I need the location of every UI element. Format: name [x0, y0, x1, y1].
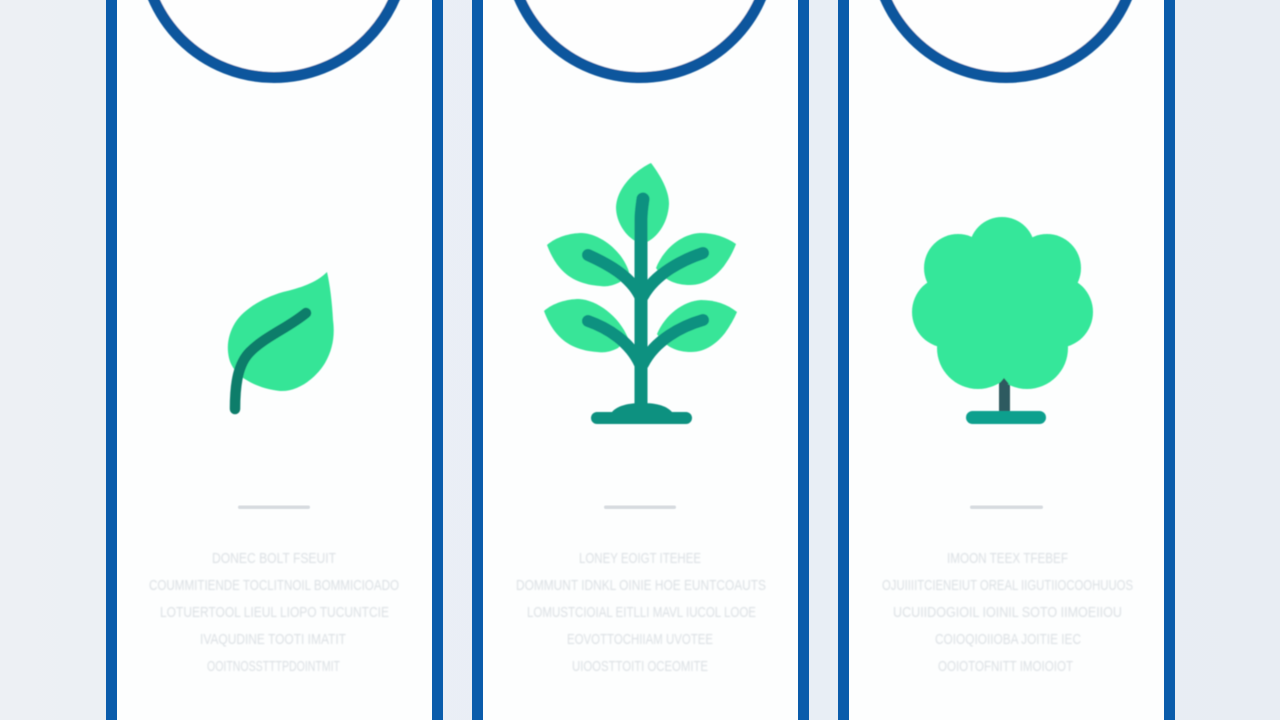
text block: young plant description: UIOOSTTOITI OCEOMITE [572, 658, 708, 675]
text block: mature tree description: UCUIIDOGIOIL IOINIL SOTO IIMOEIIOU [893, 604, 1122, 621]
panel: young plant stage [478, 0, 804, 720]
text block: seedling description: DONEC BOLT FSEUIT [212, 550, 336, 567]
text block: seedling description: COUMMITIENDE TOCLITNOIL BOMMICIOADO [149, 577, 399, 594]
text block: young plant description: LONEY EOIGT ITEHEE [579, 550, 701, 567]
divider: seedling [238, 506, 310, 509]
circle: young plant badge [508, 0, 772, 78]
text block: seedling description: IVAQUDINE TOOTI IMATIT [200, 631, 346, 648]
text block: young plant description: DOMMUNT IDNKL OINIE HOE EUNTCOAUTS [516, 577, 766, 594]
text block: mature tree description: IMOON TEEX TFEBEF [947, 550, 1068, 567]
text block: young plant description [516, 550, 766, 675]
divider: young plant [604, 506, 676, 509]
panel: mature tree stage [844, 0, 1170, 720]
icon: young plant [544, 163, 737, 424]
text block: seedling description: OOITNOSSTTTPDOINTMIT [207, 658, 340, 675]
divider: mature tree [970, 506, 1043, 509]
icon: tree [912, 217, 1093, 424]
text block: mature tree description [882, 550, 1133, 675]
text block: young plant description: LOMUSTCIOIAL EITLLI MAVL IUCOL LOOE [527, 604, 756, 621]
panel: seedling stage [112, 0, 438, 720]
circle: mature tree badge [874, 0, 1138, 78]
text block: mature tree description: OJUIIIITCIENEIUT OREAL IIGUTIIOCOOHUUOS [882, 577, 1133, 594]
circle: seedling badge [142, 0, 406, 78]
icon: leaf [228, 272, 334, 409]
text block: seedling description [149, 550, 399, 675]
text block: seedling description: LOTUERTOOL LIEUL LIOPO TUCUNTCIE [160, 604, 389, 621]
text block: young plant description: EOVOTTOCHIIAM UVOTEE [567, 631, 713, 648]
text block: mature tree description: COIOQIOIIOBA JOITIE IEC [935, 631, 1081, 648]
text block: mature tree description: OOIOTOFNITT IMOIOIOT [938, 658, 1073, 675]
